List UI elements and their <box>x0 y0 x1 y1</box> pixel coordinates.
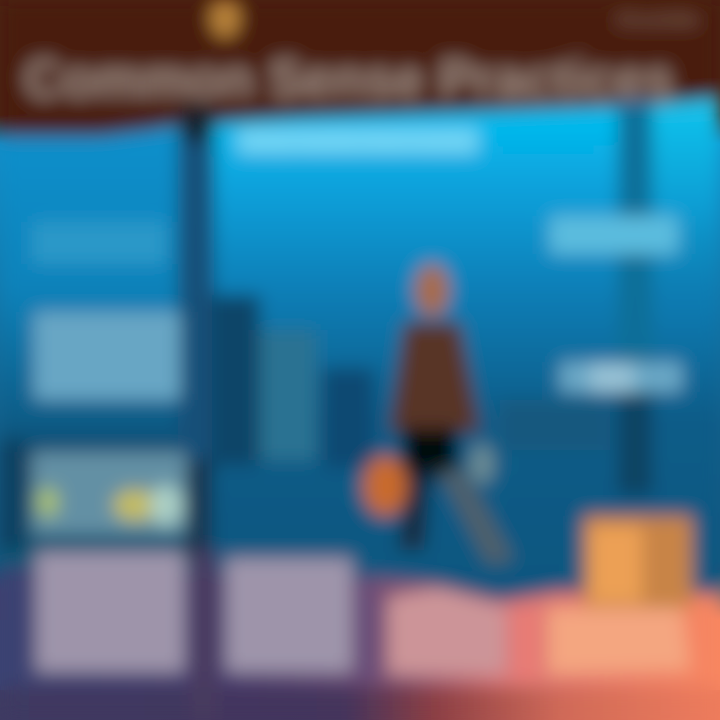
text block: right column body <box>560 362 682 392</box>
person: torso <box>390 322 480 432</box>
column divider: right <box>618 100 652 495</box>
person: legs <box>398 428 514 565</box>
panel: sky background <box>0 90 720 620</box>
card: footer 4 <box>548 608 690 674</box>
person: head <box>415 264 449 316</box>
text block: left column body <box>34 312 180 400</box>
right edge base <box>690 570 720 620</box>
card: footer 1 <box>36 552 184 672</box>
panel: header band <box>0 0 720 136</box>
panel: orange box <box>584 516 692 608</box>
column divider: left <box>178 105 214 560</box>
bottom strip base <box>0 690 720 720</box>
title: Common Sense Practices <box>24 47 674 110</box>
panel: legend card <box>32 452 186 534</box>
text block: right column heading <box>550 216 678 254</box>
footer base <box>0 620 720 690</box>
icon: header badge <box>210 0 240 38</box>
panel: footer band <box>0 566 720 720</box>
subtitle: Daily habits that matter <box>240 130 476 155</box>
footer column dividers <box>192 550 536 720</box>
text: header tag: Guide <box>616 9 700 31</box>
illustration: city skyline <box>212 295 610 468</box>
illustration: walking person <box>363 264 514 565</box>
card: footer 3 <box>388 588 506 674</box>
person: orange bag <box>363 456 407 516</box>
text block: left column heading <box>32 222 166 264</box>
card: footer 2 <box>226 558 352 672</box>
